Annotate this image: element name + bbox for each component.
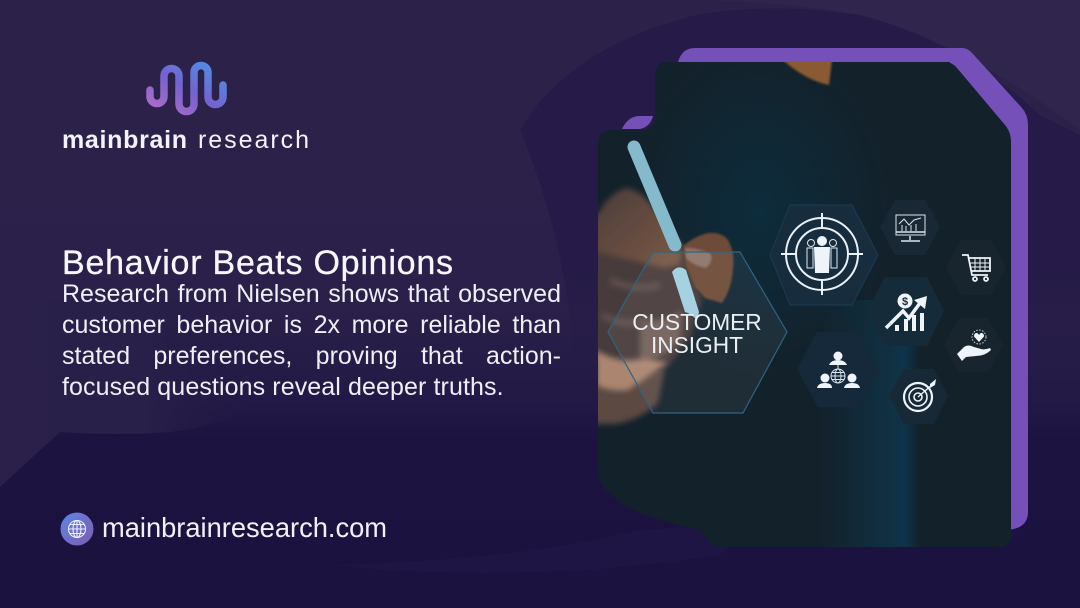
body text <box>62 280 561 401</box>
logo wordmark: research <box>198 126 309 154</box>
hexagon icon: financial growth: $ <box>902 296 908 308</box>
neck <box>783 60 832 85</box>
body text: customer behavior is 2x more reliable than <box>62 311 561 339</box>
hexagon: customer insight <box>608 252 787 413</box>
website text: mainbrainresearch.com <box>102 512 387 543</box>
photo panel: customer insight <box>590 40 1020 555</box>
hexagon icon: target audience <box>770 205 878 305</box>
logo wordmark: mainbrain <box>62 126 187 154</box>
hexagon icon: shopping cart <box>962 254 991 282</box>
back of hand and curled fingers <box>590 215 702 366</box>
thumb <box>683 233 733 303</box>
icon: globe <box>60 512 94 546</box>
index finger <box>594 188 682 268</box>
customer insight label: CUSTOMER <box>632 309 762 335</box>
hexagon icon: caring hand <box>957 330 991 361</box>
heading: Behavior Beats Opinions <box>62 244 453 282</box>
lower palm <box>592 368 665 424</box>
body text: Research from Nielsen shows that observed <box>62 280 561 308</box>
website link <box>60 512 387 546</box>
logo wave icon <box>150 66 223 112</box>
hexagon icon: global community <box>797 332 860 407</box>
body text: stated preferences, proving that action- <box>62 342 561 370</box>
logo <box>62 66 309 154</box>
photo background <box>590 40 1020 555</box>
hexagon icon: monitor chart <box>880 200 940 255</box>
customer insight label: INSIGHT <box>651 332 743 358</box>
pen <box>634 147 699 320</box>
purple frame behind photo <box>622 48 1028 530</box>
hexagon icon: financial growth <box>867 277 944 346</box>
hexagon icon: bullseye <box>889 369 948 424</box>
body text: focused questions reveal deeper truths. <box>62 373 504 401</box>
hand <box>590 188 733 424</box>
